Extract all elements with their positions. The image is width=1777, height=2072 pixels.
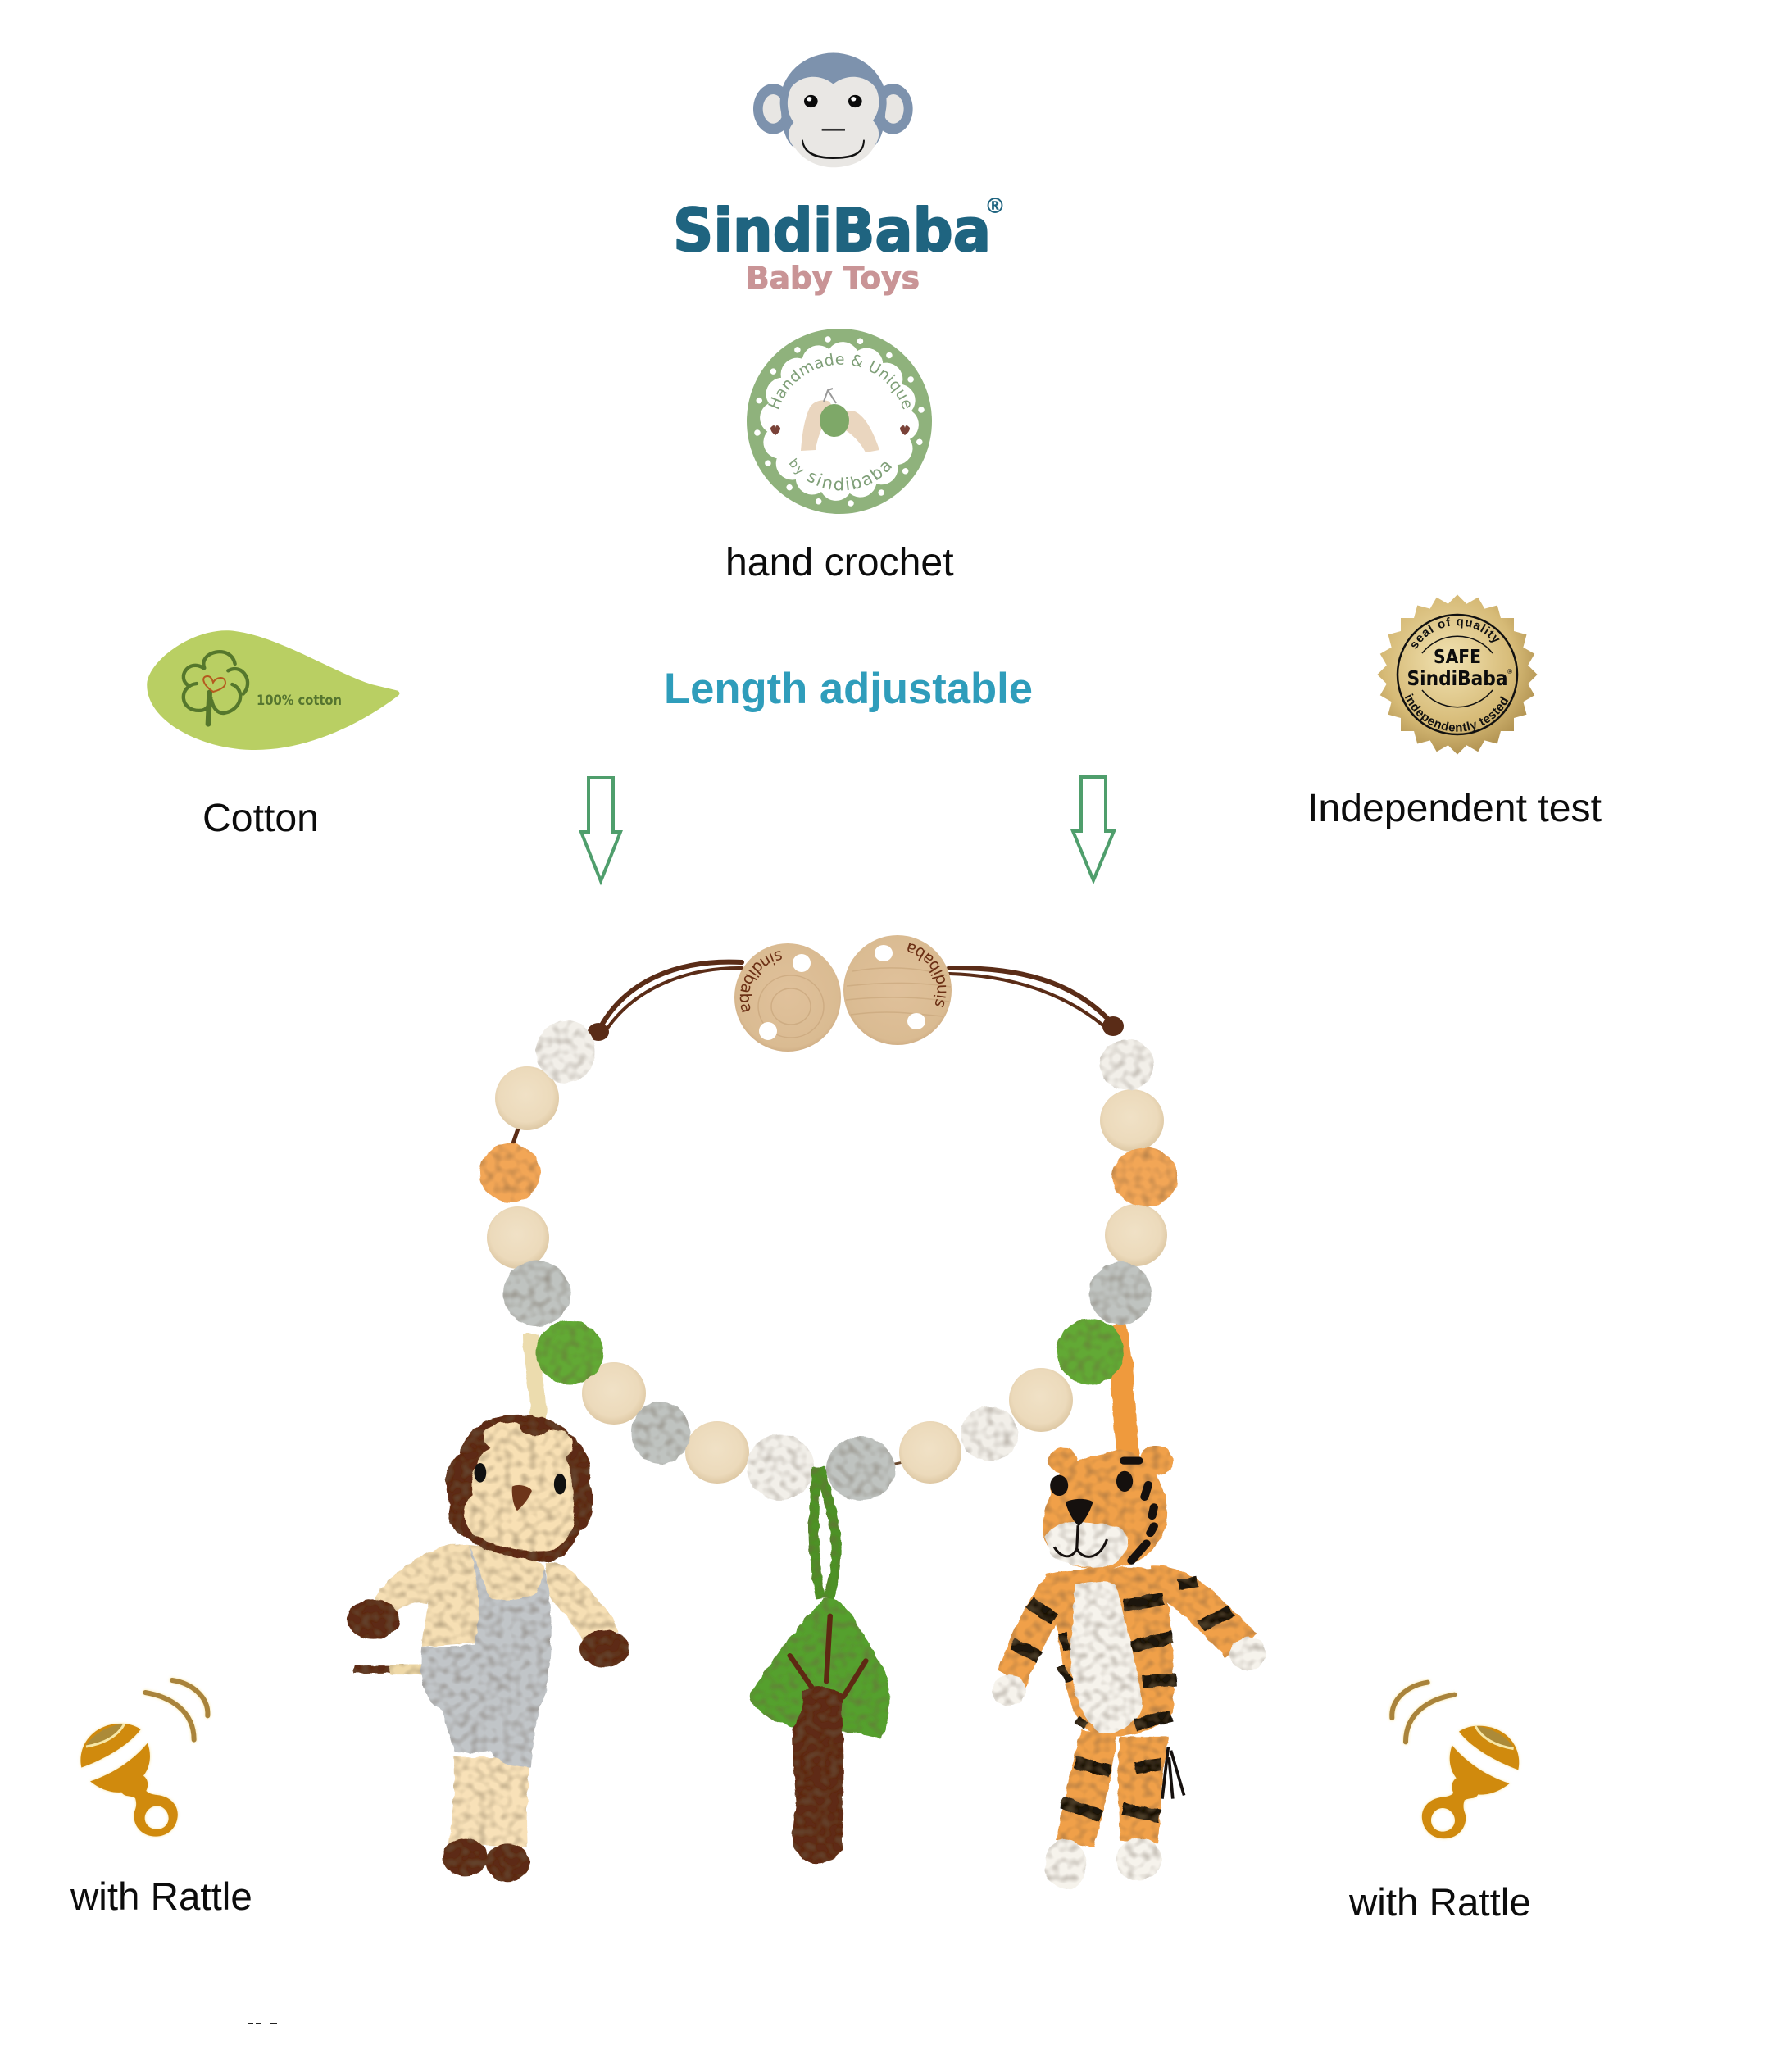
label: hand crochet: hand crochet <box>725 540 954 584</box>
badge: handmade and unique: by sindibaba <box>789 457 892 490</box>
icon: right rattle <box>1392 1683 1519 1838</box>
logo wordmark: SindiBaba: SindiBaba <box>673 196 991 265</box>
toy: crochet tiger <box>992 1446 1266 1889</box>
toy: crochet tree pendant <box>750 1468 889 1864</box>
seal of quality badge: ® <box>1507 668 1513 675</box>
heading: Length adjustable: Length adjustable <box>664 665 1033 713</box>
icon: cotton leaf <box>147 630 399 750</box>
toy: crochet lion <box>347 1415 629 1882</box>
logo: monkey mascot <box>753 53 913 167</box>
icon text: 100% cotton: 100% cotton <box>257 693 342 709</box>
icon: left rattle <box>80 1680 207 1837</box>
toy: wooden clips: sindibaba <box>739 951 782 1013</box>
label: with Rattle right: with Rattle <box>1348 1881 1531 1924</box>
toy: crochet green beads <box>536 1319 1124 1384</box>
seal of quality badge: SindiBaba <box>1407 666 1508 690</box>
toy: crochet orange beads <box>479 1143 1178 1206</box>
arrow: right down <box>1073 777 1114 880</box>
label: Cotton: Cotton <box>202 796 319 840</box>
badge: handmade and unique: Handmade & Unique <box>768 352 911 410</box>
seal of quality badge: SAFE <box>1434 647 1481 668</box>
toy: lion loop cord <box>531 1334 539 1418</box>
toy: hanging cords <box>513 962 1115 1470</box>
seal of quality badge: independently tested <box>1405 693 1508 732</box>
cropped text fragment at bottom <box>248 2023 277 2024</box>
registered mark: ® <box>984 194 1006 219</box>
toy: cord knots <box>588 1016 1124 1041</box>
label: Independent test: Independent test <box>1307 786 1602 830</box>
arrow: left down <box>581 778 620 881</box>
toy: wooden clips: sindibaba <box>907 943 946 1008</box>
toy: wooden clips <box>734 935 952 1052</box>
toy: tiger loop cord <box>1115 1325 1129 1463</box>
seal of quality badge: seal of quality <box>1411 617 1500 649</box>
badge: handmade and unique <box>747 329 932 514</box>
toy: wooden beads <box>487 1066 1167 1484</box>
toy: crochet white beads <box>536 1020 1154 1500</box>
toy: crochet gray beads <box>503 1261 1152 1501</box>
seal of quality badge <box>1377 595 1538 754</box>
logo subtitle: Baby Toys: Baby Toys <box>746 261 920 296</box>
label: with Rattle left: with Rattle <box>70 1875 252 1919</box>
